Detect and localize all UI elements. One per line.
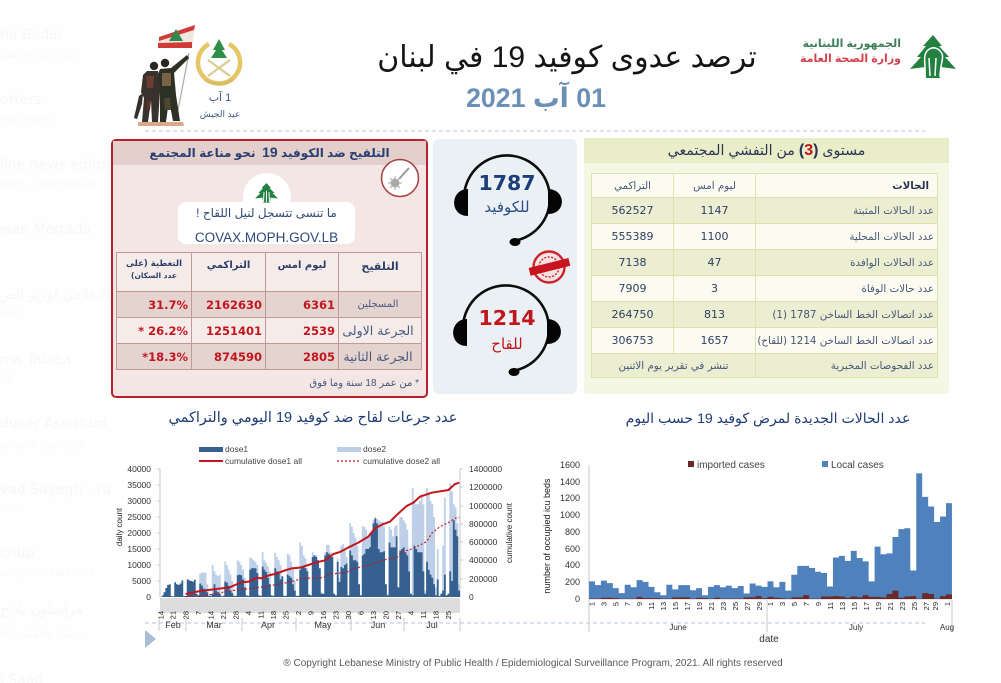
axis lines — [589, 465, 952, 632]
date tick labels: 1 — [588, 602, 596, 606]
vaccination table: عدد السكان) — [131, 271, 177, 280]
date tick labels: 4 — [406, 611, 416, 615]
right axis ticks: 1000000 — [469, 501, 502, 511]
date tick labels: 27 — [922, 602, 931, 610]
axis lines — [157, 469, 463, 597]
date tick labels: 20 — [382, 611, 390, 619]
cases table: 1657 — [700, 334, 728, 347]
imported case bars — [589, 591, 952, 599]
cumulative lines — [186, 483, 459, 597]
background ghost text column: مراسلون بلا ح — [0, 602, 83, 618]
month labels: May — [314, 620, 332, 630]
date tick labels: 1 — [766, 602, 775, 606]
y axis ticks: 1000 — [560, 510, 580, 520]
date tick labels: 9 — [814, 602, 823, 606]
background ghost text column: dam: ...smafZIDQD — [0, 179, 96, 190]
background ghost text column: ma: Video — [0, 114, 50, 125]
covid hotline number: 1787 — [478, 171, 536, 195]
transmission panel heading: مستوى (3) من التفشي المجتمعي — [668, 142, 865, 159]
callout message: ما تنسى تتسجل لنيل اللقاح ! — [196, 206, 337, 220]
date tick labels: 9 — [306, 611, 316, 615]
callout box — [178, 202, 355, 244]
date tick labels: 23 — [332, 611, 340, 619]
left axis ticks: 5000 — [132, 576, 151, 586]
date tick labels: 30 — [344, 611, 353, 619]
cases legend — [688, 460, 884, 471]
background ghost text column: ma Tabiea — [0, 352, 71, 368]
cases table: 555389 — [612, 230, 654, 243]
date tick labels: 25 — [282, 611, 290, 619]
background ghost text column: im: ظرة والاهالي ... — [0, 629, 87, 640]
background ghost text column: wan Mortada — [0, 222, 91, 238]
date tick labels: 18 — [269, 611, 278, 619]
vaccination table: الجرعة الثانية — [343, 349, 413, 364]
left axis ticks: 35000 — [127, 480, 151, 490]
date heading: 01 آب 2021 — [466, 83, 606, 113]
date tick labels: 19 — [874, 602, 883, 610]
background ghost text column: aHrjbIZ1TKaf92eL6 — [0, 568, 96, 579]
date tick labels: 7 — [194, 611, 203, 615]
y axis ticks: 600 — [565, 544, 580, 554]
vaccination table: * 26.2% — [138, 324, 188, 338]
heading: vaccine doses chart: عدد جرعات لقاح ضد كوفيد 19 اليومي والتراكمي — [169, 410, 457, 426]
date tick labels: 1 — [943, 602, 952, 606]
cases table: 1147 — [700, 204, 728, 217]
cases table: عدد الفحوصات المخبرية — [831, 360, 934, 372]
y axis ticks: 400 — [565, 560, 580, 570]
cases table: 7138 — [618, 256, 646, 269]
date tick labels: 11 — [256, 611, 266, 619]
date tick labels: 11 — [826, 602, 835, 610]
date tick labels: 21 — [168, 611, 178, 619]
date tick labels — [156, 611, 453, 619]
main title: ترصد عدوى كوفيد 19 في لبنان — [377, 41, 757, 74]
month labels: Aug — [940, 623, 954, 632]
cases table: 3 — [711, 282, 718, 295]
month labels: Apr — [261, 620, 275, 630]
chart: new cases — [542, 460, 954, 645]
icon: vaccine hotline headset — [453, 285, 561, 376]
month labels: Feb — [165, 620, 181, 630]
vaccination table — [116, 252, 422, 370]
date tick labels — [588, 602, 952, 610]
callout url: COVAX.MOPH.GOV.LB — [195, 230, 338, 245]
cases table: 813 — [704, 308, 725, 321]
cases table: 7909 — [618, 282, 646, 295]
cases table: عدد حالات الوفاة — [861, 282, 934, 294]
background ghost text column: hoto — [0, 309, 22, 320]
date tick labels: 29 — [755, 602, 764, 610]
vaccination footnote: * من عمر 18 سنة وما فوق — [309, 378, 419, 389]
cases table: التراكمي — [614, 180, 651, 192]
date tick labels: 27 — [394, 611, 403, 619]
background ghost text column: ducer Assistant — [0, 416, 108, 432]
transmission panel heading — [584, 138, 949, 163]
date tick labels: 16 — [319, 611, 328, 619]
ministry name: republic: الجمهورية اللبنانية — [803, 38, 901, 50]
y axis ticks: 1400 — [560, 477, 580, 487]
panel: hotlines — [433, 139, 577, 394]
axis titles: cumulative count — [505, 502, 514, 563]
cases table: 264750 — [612, 308, 654, 321]
date tick labels: 25 — [444, 611, 453, 619]
cases table: ليوم امس — [693, 180, 736, 192]
left axis ticks — [127, 464, 151, 602]
date tick labels: 4 — [244, 611, 253, 615]
date tick labels: 11 — [647, 602, 656, 610]
y axis ticks — [560, 460, 580, 604]
date tick labels: 15 — [671, 602, 680, 610]
right axis ticks: 400000 — [469, 555, 498, 565]
background ghost text column: خرجية بين بلدتي دي — [0, 439, 84, 450]
vaccination table: التغطية (على — [126, 259, 182, 269]
icon: army emblem — [198, 39, 240, 84]
vaccination table: 2162630 — [206, 298, 262, 312]
right axis ticks: 1400000 — [469, 464, 502, 474]
vaccination table: التراكمي — [207, 260, 250, 271]
x axis title: date — [759, 634, 779, 645]
date tick labels: 13 — [838, 602, 847, 610]
y axis ticks: 1600 — [560, 460, 580, 470]
date tick labels: 5 — [790, 602, 799, 606]
chart legend: doses: cumulative dose2 all — [363, 456, 440, 466]
date tick labels: 23 — [898, 602, 907, 610]
vaccination table: 2539 — [303, 324, 335, 338]
cumulative dose1 line — [186, 483, 459, 594]
date tick labels: 5 — [612, 602, 620, 606]
month labels — [159, 618, 460, 631]
background ghost text column: vad Sayegh - Fa — [0, 482, 110, 498]
background ghost text column: الاعلامي لوزير الص — [0, 287, 110, 303]
heading: new cases chart: عدد الحالات الجديدة لمرض كوفيد 19 حسب اليوم — [626, 410, 910, 426]
ministry logo: text and cedar — [800, 35, 956, 78]
month labels: Mar — [206, 620, 222, 630]
icon: lebanese flag — [158, 25, 195, 110]
vaccination panel heading: التلقيح ضد الكوفيد 19 نحو مناعة المجتمع — [149, 144, 390, 160]
date tick labels: 3 — [778, 602, 787, 606]
cases table — [591, 173, 938, 378]
vaccination table: المسجلين — [358, 299, 398, 310]
date tick labels: 21 — [707, 602, 716, 610]
y axis ticks: 200 — [565, 577, 580, 587]
date tick labels: 14 — [156, 611, 166, 619]
axis titles — [115, 502, 514, 563]
covid hotline label: للكوفيد — [484, 199, 530, 216]
axis titles: daily count — [115, 507, 124, 546]
background ghost text column: line news editor — [0, 157, 110, 173]
vaccination table: *18.3% — [142, 350, 188, 364]
cumulative dose2 line — [186, 517, 459, 597]
background ghost text column: 21 — [0, 374, 13, 385]
date tick labels: 25 — [910, 602, 919, 610]
y axis ticks: 1200 — [560, 493, 580, 503]
vaccination table: ليوم امس — [278, 260, 326, 271]
month labels — [669, 623, 954, 632]
left axis ticks: 20000 — [127, 528, 151, 538]
icon: syringe and virus — [380, 158, 420, 198]
icon: small cedar — [255, 183, 278, 203]
vaccine hotline number: 1214 — [478, 306, 536, 330]
vaccination table: التلقيح — [361, 260, 399, 273]
date tick labels: 17 — [683, 602, 692, 610]
y axis ticks: 800 — [565, 527, 580, 537]
date tick labels: 13 — [369, 611, 378, 619]
cases table: عدد الحالات المثبتة — [853, 204, 934, 216]
cases table: عدد الحالات الوافدة — [850, 256, 934, 268]
chart legend: doses: cumulative dose1 all — [225, 456, 302, 466]
dose2 daily bars — [198, 483, 460, 597]
date tick labels: 29 — [931, 602, 940, 610]
chart legend: doses — [199, 444, 440, 466]
date tick labels: 27 — [743, 602, 752, 610]
date tick labels: 11 — [419, 611, 428, 619]
month labels: Jun — [371, 620, 385, 630]
y axis title: number of occupied icu beds — [542, 478, 552, 594]
vaccination table: 2805 — [303, 350, 335, 364]
date tick labels: 7 — [623, 602, 632, 606]
right axis ticks — [469, 464, 502, 602]
callout circle backing — [243, 173, 291, 221]
left axis ticks: 0 — [146, 592, 151, 602]
left axis ticks: 30000 — [127, 496, 151, 506]
y axis ticks: 0 — [575, 594, 580, 604]
left axis ticks: 10000 — [127, 560, 151, 570]
cases table: عدد الحالات المحلية — [849, 230, 934, 242]
date tick labels: 23 — [719, 602, 728, 610]
cases table: عدد اتصالات الخط الساخن 1787 (1) — [772, 308, 934, 320]
icon: ministry cedar — [910, 35, 956, 78]
background ghost text column — [0, 0, 112, 683]
footer copyright: ® Copyright Lebanese Ministry of Public Health / Epidemiological Surveillance Program, 2021. All rights reserved — [283, 658, 783, 669]
vaccination panel heading — [113, 141, 426, 165]
vaccination table: الجرعة الاولى — [342, 323, 414, 338]
right axis ticks: 200000 — [469, 574, 498, 584]
right axis ticks: 800000 — [469, 519, 498, 529]
army day label: عيد الجيش — [200, 109, 240, 119]
chart legend: doses: dose1 — [225, 444, 248, 454]
panel: vaccination — [111, 139, 428, 398]
vaccination table: 31.7% — [148, 298, 188, 312]
cases table: عدد اتصالات الخط الساخن 1214 (للقاح) — [757, 334, 934, 346]
chart: vaccine doses — [115, 444, 514, 631]
date tick labels: 6 — [356, 611, 366, 615]
month labels: Jul — [426, 620, 438, 630]
date tick labels: 18 — [432, 611, 440, 619]
vaccination table: 874590 — [214, 350, 262, 364]
date tick labels: 19 — [695, 602, 704, 610]
vaccination table: 6361 — [303, 298, 335, 312]
date band — [160, 598, 460, 613]
date tick labels: 3 — [600, 602, 608, 606]
date tick labels: 25 — [731, 602, 740, 610]
army day emblem with soldiers and flag — [134, 25, 242, 126]
background ghost text column: orters — [0, 92, 41, 108]
chart legend: doses: dose2 — [363, 444, 386, 454]
month labels: July — [849, 623, 863, 632]
cases table: تنشر في تقرير يوم الاثنين — [619, 360, 728, 372]
left axis ticks: 25000 — [127, 512, 151, 522]
date tick labels: 28 — [232, 611, 240, 619]
month labels: June — [669, 623, 687, 632]
panel: community transmission — [584, 138, 949, 394]
background ghost text column: chup — [0, 545, 34, 561]
date tick labels: 9 — [635, 602, 644, 606]
date tick labels: 2 — [294, 611, 303, 615]
army day date: 1 آب — [209, 92, 231, 104]
cases table: الحالات — [892, 180, 929, 192]
cases legend: imported cases — [697, 460, 765, 471]
local case bars — [589, 473, 952, 599]
date tick labels: 7 — [802, 602, 811, 606]
background ghost text column: hoto — [0, 504, 22, 515]
cases table: 47 — [708, 256, 722, 269]
cases table: 306753 — [612, 334, 654, 347]
icon: toll free stamp — [529, 252, 570, 282]
cases legend: Local cases — [831, 460, 884, 471]
icon: soldiers — [134, 55, 189, 126]
date tick labels: 17 — [862, 602, 871, 610]
dose1 daily bars — [160, 519, 460, 597]
date tick labels: 21 — [219, 611, 228, 619]
icon: covid hotline headset — [454, 155, 562, 246]
right axis ticks: 1200000 — [469, 482, 502, 492]
ministry name: health: وزارة الصحة العامة — [800, 53, 901, 65]
left axis ticks: 40000 — [127, 464, 151, 474]
left axis ticks: 15000 — [127, 544, 151, 554]
right axis ticks: 0 — [469, 592, 474, 602]
registration callout — [178, 173, 355, 245]
right axis ticks: 600000 — [469, 537, 498, 547]
date tick labels: 14 — [206, 611, 216, 619]
date tick labels: 28 — [182, 611, 190, 619]
cases table: 1100 — [700, 230, 728, 243]
cases table: 562527 — [612, 204, 654, 217]
date tick labels: 13 — [659, 602, 668, 610]
vaccine hotline label: للقاح — [491, 336, 523, 353]
vaccination table: 1251401 — [206, 324, 262, 338]
background ghost text column: كلو رح يكر عنا هلق — [0, 49, 80, 60]
date tick labels: 21 — [886, 602, 895, 610]
date tick labels: 15 — [850, 602, 859, 610]
background ghost text column: na Bader — [0, 27, 63, 43]
